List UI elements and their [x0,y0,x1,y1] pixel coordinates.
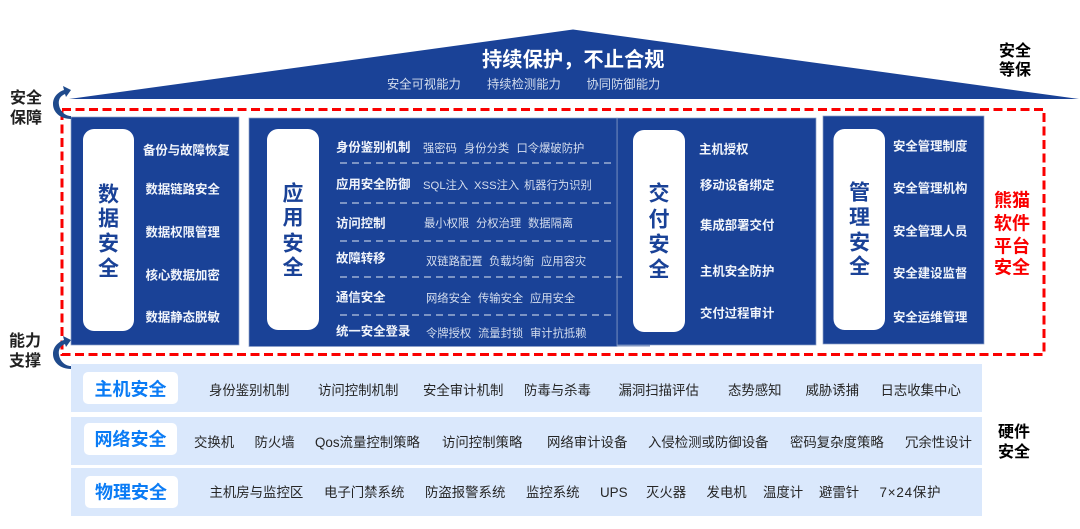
physical security items: 发电机 [706,485,747,500]
physical security items: 避雷针 [819,485,859,500]
tab: host security [83,372,178,404]
delivery security items: 主机安全防护 [700,264,774,278]
row: communication: 网络安全 [426,291,472,305]
icon: upper curved arrow [53,86,71,119]
band: host security [71,364,982,412]
label: capability support: 支撑 [9,351,41,370]
label: security assurance: 安全 [10,88,42,107]
management security items: 安全管理制度 [893,138,968,154]
row: failover: 故障转移 [336,250,386,266]
row: failover: 双链路配置 [426,254,482,268]
delivery security items [699,142,774,320]
management security items: 安全建设监督 [893,266,967,280]
row: access control: 数据隔离 [528,216,573,230]
delivery security pill: 交 [648,182,670,206]
label: hardware security [998,423,1030,461]
label: capability support [9,331,41,370]
host security items: 日志收集中心 [880,383,961,398]
tab: host security: 主机安全 [94,378,166,400]
row: identity: 口令爆破防护 [516,141,584,155]
data security pill: 数 [98,184,119,206]
tab: physical security: 物理安全 [95,482,167,502]
data security items: 数据链路安全 [146,182,220,196]
host security items [209,382,961,398]
row: identity: 强密码 [423,141,457,155]
physical security items: 主机房与监控区 [210,485,303,500]
application security pill: 用 [282,206,304,230]
host security items: 态势感知 [728,382,782,398]
label: security compliance: 安全 [999,41,1031,60]
panel: delivery security [617,118,816,345]
row: communication: 应用安全 [530,291,576,305]
row: application defence: 机器行为识别 [524,178,592,192]
network security items: 交换机 [194,434,235,450]
row: failover: 负载均衡 [489,254,534,268]
physical security items: 7×24保护 [880,485,940,500]
physical security items: UPS [600,485,628,500]
label: Panda software platform security [994,190,1030,278]
delivery security pill: 安 [648,234,670,256]
management security items: 安全管理机构 [893,180,967,196]
management security pill: 管 [849,182,870,204]
data security pill [83,129,134,331]
tab: network security: 网络安全 [94,428,166,450]
row: communication: 通信安全 [336,290,386,304]
data security pill: 全 [98,256,119,280]
label: security assurance: 保障 [10,108,42,127]
roof capabilities: 安全可视能力 [387,76,461,92]
management security items [893,138,968,324]
management security items: 安全管理人员 [893,224,967,238]
row: single sign-on [336,324,586,340]
network security items: 密码复杂度策略 [790,434,884,450]
application security pill [267,129,319,330]
physical security items: 灭火器 [646,485,687,500]
management security pill [834,129,885,330]
row: single sign-on: 流量封锁 [478,326,523,340]
physical security items: 电子门禁系统 [324,485,404,500]
data security items: 备份与故障恢复 [143,142,230,158]
row: access control: 分权治理 [476,216,521,230]
label: security assurance [10,88,42,127]
network security items: 防火墙 [254,435,295,450]
physical security items [210,485,940,500]
data security items: 数据权限管理 [146,224,220,240]
host security items: 漏洞扫描评估 [618,383,699,398]
data security items [143,142,230,324]
delivery security items: 移动设备绑定 [700,178,774,192]
label: Panda software platform security: 平台 [994,236,1030,256]
roof panel: continuous protection [69,30,1079,99]
physical security items: 温度计 [763,485,803,500]
row: single sign-on: 令牌授权 [426,326,471,340]
network security items [194,434,972,450]
data security items: 核心数据加密 [146,268,220,282]
delivery security pill: 付 [648,208,670,232]
row: communication: 传输安全 [478,291,524,305]
delivery security pill: 全 [648,258,670,282]
delivery security items: 交付过程审计 [700,306,774,320]
management security pill: 安 [849,232,870,254]
label: Panda software platform security: 软件 [994,214,1030,234]
row: application defence: SQL注入 [423,178,468,192]
row: communication [336,290,576,305]
network security items: 冗余性设计 [905,434,972,450]
management security items: 安全运维管理 [893,310,968,324]
label: security compliance: 等保 [999,60,1031,79]
band: physical security [71,468,982,516]
row: failover: 应用容灾 [541,254,586,268]
application security pill: 安 [282,232,304,256]
network security items: 网络审计设备 [547,434,628,450]
label: security compliance [999,41,1031,79]
label: hardware security: 安全 [998,442,1030,461]
label: Panda software platform security: 安全 [994,256,1030,278]
tab: physical security [85,476,178,508]
band: network security [71,417,982,465]
row: single sign-on: 统一安全登录 [336,324,410,338]
panel: application security [249,118,650,346]
host security items: 身份鉴别机制 [209,383,289,398]
row: access control: 访问控制 [336,216,386,230]
network security items: Qos流量控制策略 [315,434,421,450]
network security items: 入侵检测或防御设备 [648,434,769,450]
label: Panda software platform security: 熊猫 [994,190,1030,210]
panel: management security [823,116,984,344]
delivery security pill [633,130,685,332]
roof capabilities [387,76,660,92]
roof capabilities: 协同防御能力 [586,76,660,92]
roof capabilities: 持续检测能力 [487,76,561,92]
management security pill: 全 [849,254,870,278]
icon: lower curved arrow [53,336,71,369]
tab: network security [84,423,177,455]
physical security items: 监控系统 [526,485,580,500]
row: application defence [336,176,592,192]
network security items: 访问控制策略 [442,434,523,450]
label: hardware security: 硬件 [998,423,1030,441]
data security pill: 据 [98,208,119,230]
roof title: 持续保护，不止合规 [482,48,665,72]
host security items: 防毒与杀毒 [524,383,591,398]
data security pill: 安 [98,232,119,256]
host security items: 威胁诱捕 [806,383,859,398]
row: access control: 最小权限 [424,217,469,230]
physical security items: 防盗报警系统 [425,485,505,500]
data security items: 数据静态脱敏 [146,310,220,324]
application security pill: 全 [282,256,304,280]
host security items: 安全审计机制 [423,382,503,398]
delivery security items: 主机授权 [699,142,749,156]
row: identity [336,140,584,155]
delivery security items: 集成部署交付 [700,218,774,232]
row: access control [336,216,573,230]
row: application defence: 应用安全防御 [336,176,410,192]
label: capability support: 能力 [9,331,41,350]
row: application defence: XSS注入 [474,178,519,192]
row: identity: 身份鉴别机制 [336,140,410,154]
host security items: 访问控制机制 [318,383,398,398]
row: failover [336,250,586,268]
application security pill: 应 [282,182,304,206]
row: identity: 身份分类 [464,141,509,155]
panel: data security [71,117,239,345]
red dashed frame [62,110,1044,354]
management security pill: 理 [849,206,870,230]
row: single sign-on: 审计抗抵赖 [530,326,586,340]
